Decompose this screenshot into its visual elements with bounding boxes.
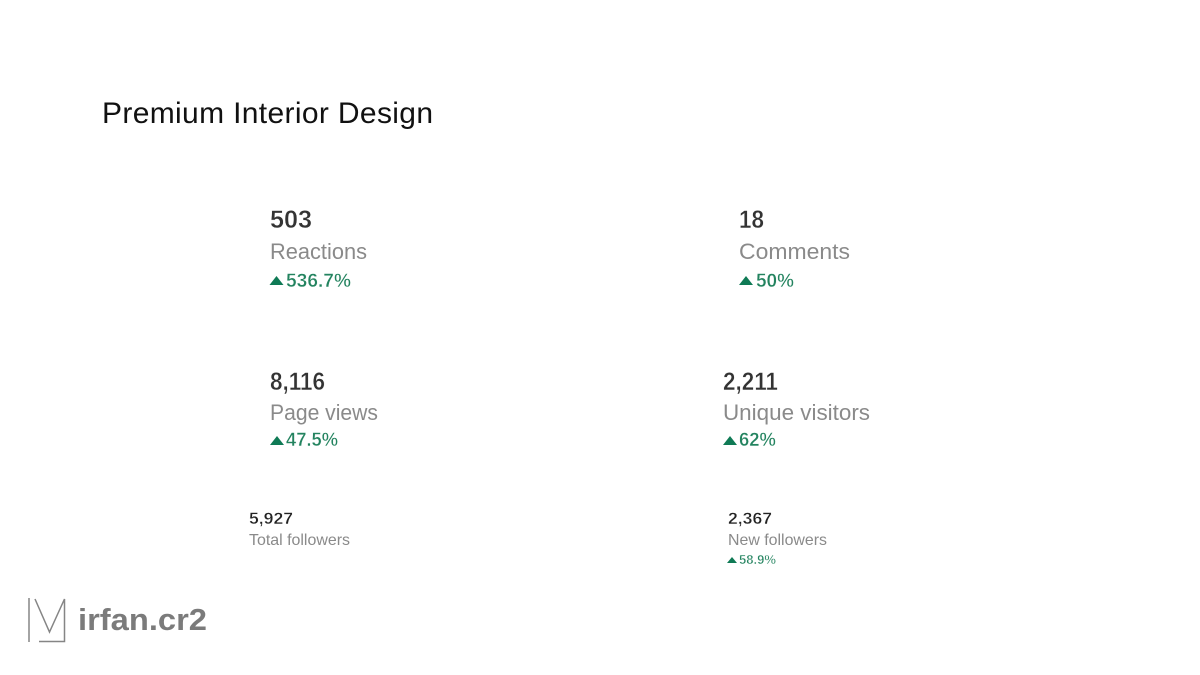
panel: page views stat: 8,116: [270, 368, 325, 396]
logo wordmark: irfan.cr2: [78, 602, 207, 637]
panel: new followers stat: 58.9%: [739, 552, 776, 567]
panel: comments stat: [739, 206, 850, 292]
panel: comments stat: 18: [739, 206, 764, 234]
panel: reactions stat: Reactions: [270, 239, 367, 264]
panel: total followers stat: Total followers: [249, 532, 350, 549]
panel: reactions stat: [270, 206, 367, 292]
panel: total followers stat: 5,927: [249, 509, 293, 528]
panel: comments stat: 50%: [756, 271, 794, 292]
panel: unique visitors stat: 2,211: [723, 368, 778, 396]
panel: page views stat: 47.5%: [286, 430, 338, 451]
panel: unique visitors stat: 62%: [739, 430, 776, 451]
panel: total followers stat: [249, 509, 350, 549]
panel: new followers stat: 2,367: [728, 509, 772, 528]
panel: unique visitors stat: [723, 368, 870, 451]
icon: M monogram: [29, 598, 64, 642]
panel: new followers stat: [727, 509, 827, 567]
title: Premium Interior Design: [102, 97, 433, 130]
panel: page views stat: [270, 368, 378, 451]
logo: irfan.cr2: [29, 598, 207, 642]
panel: comments stat: Comments: [739, 239, 850, 264]
panel: reactions stat: 536.7%: [286, 271, 351, 292]
panel: reactions stat: 503: [270, 206, 312, 234]
panel: new followers stat: New followers: [728, 532, 827, 549]
panel: page views stat: Page views: [270, 400, 378, 425]
panel: unique visitors stat: Unique visitors: [723, 400, 870, 425]
